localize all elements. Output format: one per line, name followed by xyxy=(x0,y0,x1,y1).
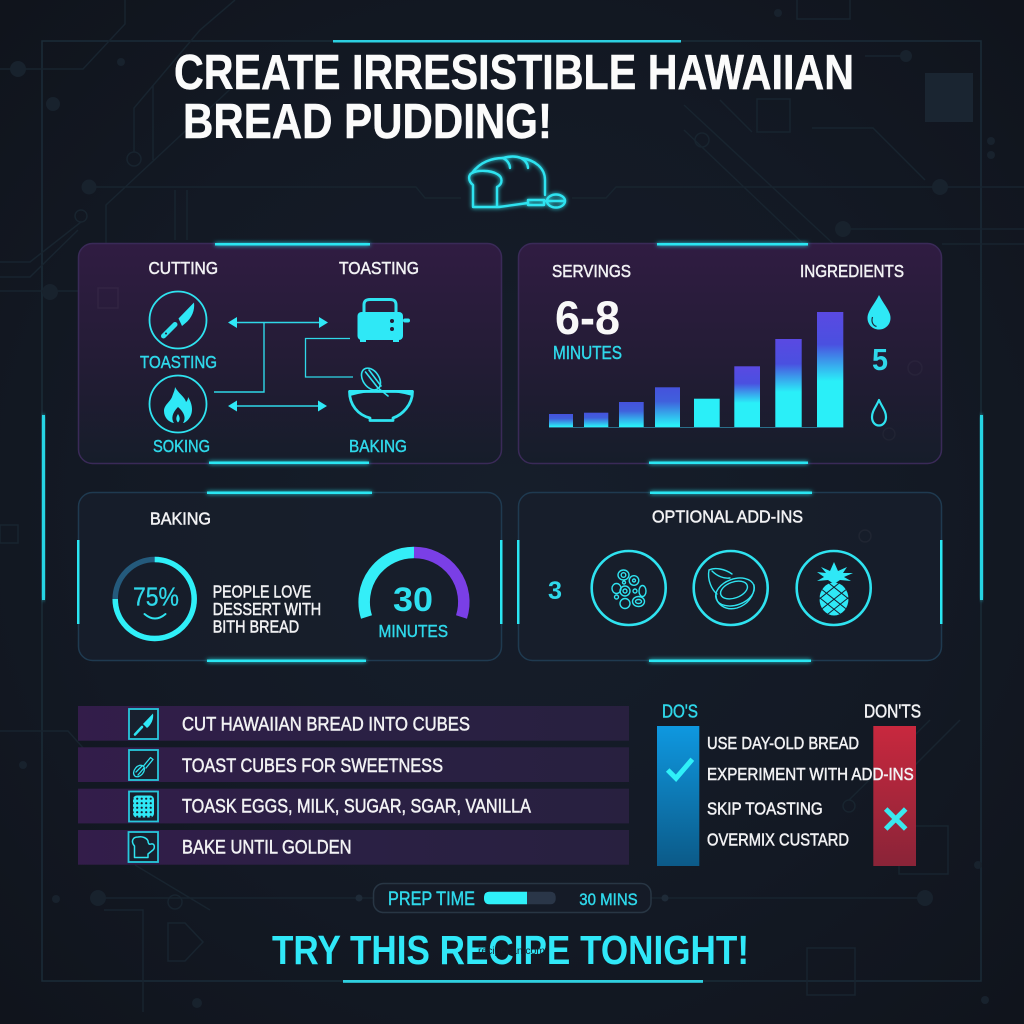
icon: whisk box xyxy=(129,750,158,780)
heading: baking: BAKING xyxy=(150,508,211,528)
step 3 row xyxy=(78,789,629,823)
step 1 row: CUT HAWAIIAN BREAD INTO CUBES xyxy=(182,714,470,736)
stat: 5 ingredients: 5 xyxy=(872,342,888,377)
do's and don'ts text: OVERMIX CUSTARD xyxy=(707,830,849,850)
don'ts bar xyxy=(873,726,916,866)
call to action: recipecan.com xyxy=(478,945,545,957)
do's and don'ts text: SKIP TOASTING xyxy=(707,798,823,818)
title: CREATE IRRESISTIBLE HAWAIIAN xyxy=(174,46,854,100)
text: people love dessert: DESSERT WITH xyxy=(213,599,321,619)
bar chart xyxy=(549,312,843,428)
step 2 row: TOAST CUBES FOR SWEETNESS xyxy=(182,755,443,777)
label: minutes: MINUTES xyxy=(553,343,622,363)
icon: flame xyxy=(150,376,206,432)
icon: toaster xyxy=(358,300,410,342)
title: BREAD PUDDING! xyxy=(183,95,552,149)
gauge: 30 minutes: 30 xyxy=(393,581,433,619)
step 4 row: BAKE UNTIL GOLDEN xyxy=(182,837,352,859)
donut chart: 75%: 75% xyxy=(133,582,179,612)
icon: knife box xyxy=(129,709,158,739)
icon: large drop xyxy=(868,295,890,330)
arrow: toaster to bowl connector xyxy=(306,338,353,377)
icon: cross mark xyxy=(886,809,906,829)
do's and don'ts text: USE DAY-OLD BREAD xyxy=(707,733,859,753)
gauge: 30 minutes: MINUTES xyxy=(378,621,448,641)
label: soaking step: SOKING xyxy=(153,436,210,456)
donut chart: 75% xyxy=(115,560,194,639)
step 1 row xyxy=(78,706,629,741)
prep time pill xyxy=(374,884,651,912)
icon: check mark xyxy=(668,759,692,778)
icon: raisins xyxy=(592,551,666,625)
panel: process flow xyxy=(78,243,502,464)
do's bar xyxy=(657,726,699,866)
heading: toasting: TOASTING xyxy=(339,258,419,278)
step 2 row xyxy=(78,747,629,782)
heading: don'ts: DON'TS xyxy=(864,701,921,721)
icon: toast box xyxy=(128,832,158,862)
text: people love dessert: PEOPLE LOVE xyxy=(213,582,311,602)
prep time pill: PREP TIME xyxy=(388,888,475,910)
stat: 6-8 servings: 6-8 xyxy=(555,291,620,344)
step 4 row xyxy=(78,830,629,865)
frame accent bars xyxy=(42,40,983,600)
step 3 row: TOASK EGGS, MILK, SUGAR, SGAR, VANILLA xyxy=(182,796,531,818)
arrow: bottom double arrow xyxy=(228,400,327,412)
icon: small drop xyxy=(872,400,886,426)
icon: coconut xyxy=(694,551,768,625)
icon: custard box xyxy=(129,792,158,822)
gauge: 30 minutes xyxy=(364,552,464,641)
icon: neon bread and whisk xyxy=(469,156,565,208)
panel: baking stats xyxy=(77,492,502,662)
progress bar xyxy=(484,892,556,904)
icon: pineapple xyxy=(797,551,871,625)
heading: optional add-ins: OPTIONAL ADD-INS xyxy=(652,507,803,527)
icon: knife xyxy=(150,292,206,348)
panel: servings and ingredients xyxy=(518,243,942,464)
icon: bowl and whisk xyxy=(349,365,413,420)
call to action: TRY THIS RECIPE TONIGHT! xyxy=(272,927,749,973)
heading: servings: SERVINGS xyxy=(552,261,631,281)
heading: cutting: CUTTING xyxy=(148,258,218,278)
label: toasting step: TOASTING xyxy=(140,352,217,372)
title xyxy=(174,46,854,149)
heading: ingredients: INGREDIENTS xyxy=(800,261,904,281)
arrow: top double arrow xyxy=(214,317,328,392)
label: baking step: BAKING xyxy=(349,436,407,456)
panel: optional add-ins xyxy=(517,492,942,662)
text: people love dessert: BITH BREAD xyxy=(213,617,299,637)
prep time pill: 30 MINS xyxy=(579,890,638,909)
text: people love dessert xyxy=(213,582,321,637)
do's and don'ts text: EXPERIMENT WITH ADD-INS xyxy=(707,764,914,784)
heading: do's: DO'S xyxy=(662,701,698,721)
stat: 3 add-ins: 3 xyxy=(548,577,562,605)
do's and don'ts text xyxy=(707,733,914,850)
panel: do's and don'ts xyxy=(657,701,921,866)
